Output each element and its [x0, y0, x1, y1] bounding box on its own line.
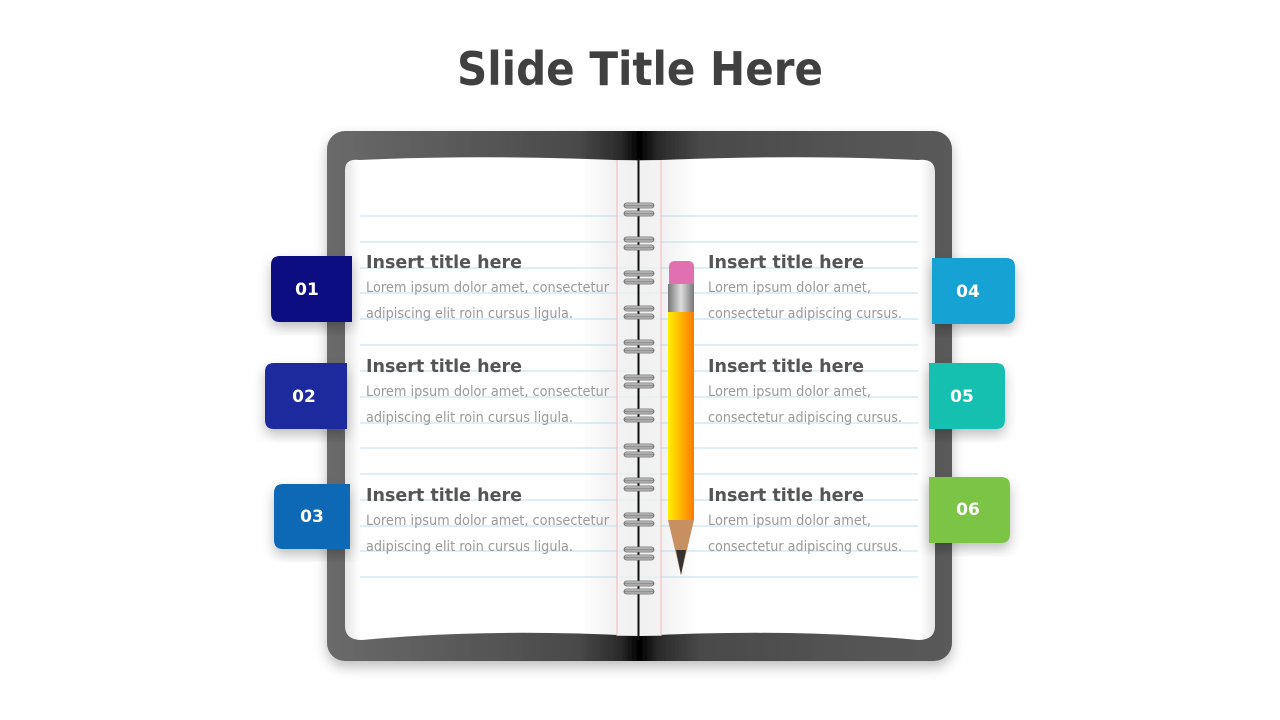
tab 01: 01: [295, 280, 319, 300]
text block 05: [708, 356, 902, 426]
text block 05: Insert title here: [708, 356, 864, 377]
spiral rings: [624, 203, 654, 594]
tab 04: [932, 258, 1015, 324]
notebook: [327, 131, 952, 661]
tab 04: 04: [956, 282, 980, 302]
text block 04: consectetur adipiscing cursus.: [708, 306, 902, 322]
text block 04: Lorem ipsum dolor amet,: [708, 280, 871, 296]
text block 02: [366, 356, 609, 426]
text block 02: Insert title here: [366, 356, 522, 377]
text block 03: Lorem ipsum dolor amet, consectetur: [366, 513, 609, 529]
text block 01: Insert title here: [366, 252, 522, 273]
text block 01: Lorem ipsum dolor amet, consectetur: [366, 280, 609, 296]
tab 02: 02: [292, 387, 316, 407]
text block 03: Insert title here: [366, 485, 522, 506]
tab 06: [929, 477, 1010, 543]
text block 02: Lorem ipsum dolor amet, consectetur: [366, 384, 609, 400]
text block 03: adipiscing elit roin cursus ligula.: [366, 539, 573, 555]
title: Slide Title Here: [457, 42, 823, 96]
tab 05: 05: [950, 387, 974, 407]
page: right: [638, 157, 935, 640]
text block 02: adipiscing elit roin cursus ligula.: [366, 410, 573, 426]
tab 05: [929, 363, 1005, 429]
text block 01: [366, 252, 609, 322]
text block 05: Lorem ipsum dolor amet,: [708, 384, 871, 400]
text block 03: [366, 485, 609, 555]
text block 06: Insert title here: [708, 485, 864, 506]
text block 06: consectetur adipiscing cursus.: [708, 539, 902, 555]
tab 01: [271, 256, 352, 322]
icon: pencil: [668, 261, 694, 575]
text block 04: [708, 252, 902, 322]
tab 03: [274, 484, 350, 549]
text block 06: Lorem ipsum dolor amet,: [708, 513, 871, 529]
page: left: [345, 157, 639, 640]
tab 03: 03: [300, 507, 324, 527]
text block 01: adipiscing elit roin cursus ligula.: [366, 306, 573, 322]
text block 04: Insert title here: [708, 252, 864, 273]
text block 05: consectetur adipiscing cursus.: [708, 410, 902, 426]
tab 06: 06: [956, 500, 980, 520]
text block 06: [708, 485, 902, 555]
tab 02: [265, 363, 347, 429]
